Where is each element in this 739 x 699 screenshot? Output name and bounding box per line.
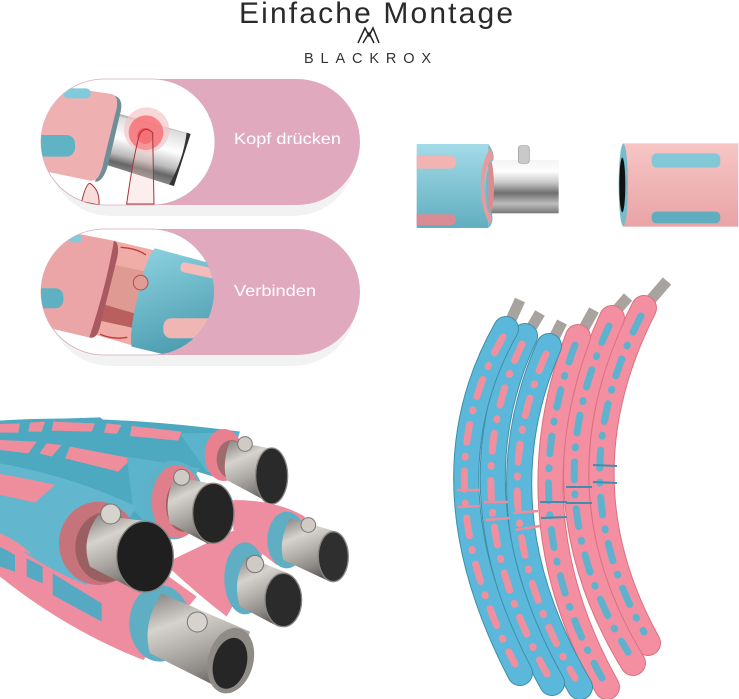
photo: separated segment ends: [417, 143, 738, 228]
tube B middle blue: [0, 437, 234, 544]
photo: close-up of six tube ends: [0, 417, 348, 699]
pink pill: [41, 229, 360, 355]
pink sleeve: [41, 232, 117, 338]
brand name: BLACKROX: [304, 51, 431, 67]
step label: Kopf drücken: [234, 131, 341, 148]
pink sleeve: [41, 82, 117, 181]
red press glow: [124, 107, 169, 153]
salmon inner tube: [96, 240, 154, 346]
white image area: [41, 229, 214, 355]
pill shadow: [48, 90, 356, 216]
blue sleeve: [131, 248, 217, 357]
panel: step 1 Kopf drücken: [33, 79, 360, 216]
tube A top blue: [0, 419, 288, 504]
finger outline: [127, 129, 154, 204]
tube F pink bottom: [0, 533, 261, 699]
illustration: join the segments: [41, 234, 214, 354]
icon: logo mark: [358, 28, 379, 43]
rotation arrows: [100, 247, 146, 338]
panel: step 2 Verbinden: [33, 229, 360, 366]
step label: Verbinden: [234, 283, 316, 300]
right pink segment with hole: [619, 143, 738, 227]
tube C large blue: [0, 463, 173, 593]
pill shadow: [48, 240, 356, 366]
foam base behind tubes: [0, 417, 167, 533]
tube D pink right: [233, 500, 348, 582]
left blue segment with pin: [417, 144, 559, 228]
hoop segment 3: [513, 322, 580, 687]
photo: six hoop segments fanned out: [457, 281, 667, 687]
hoop segment 6: [593, 281, 667, 643]
hoop segment 2: [484, 313, 552, 683]
pink pill: [41, 79, 360, 205]
hoop segment 1: [457, 300, 520, 673]
white image area: [41, 79, 215, 205]
metal tube: [102, 113, 191, 186]
illustration: press the pin: [33, 82, 191, 205]
brand logo: [304, 28, 431, 67]
tube E pink middle: [172, 531, 302, 627]
hoop segment 4: [540, 310, 607, 687]
hoop segment 5: [566, 297, 633, 663]
